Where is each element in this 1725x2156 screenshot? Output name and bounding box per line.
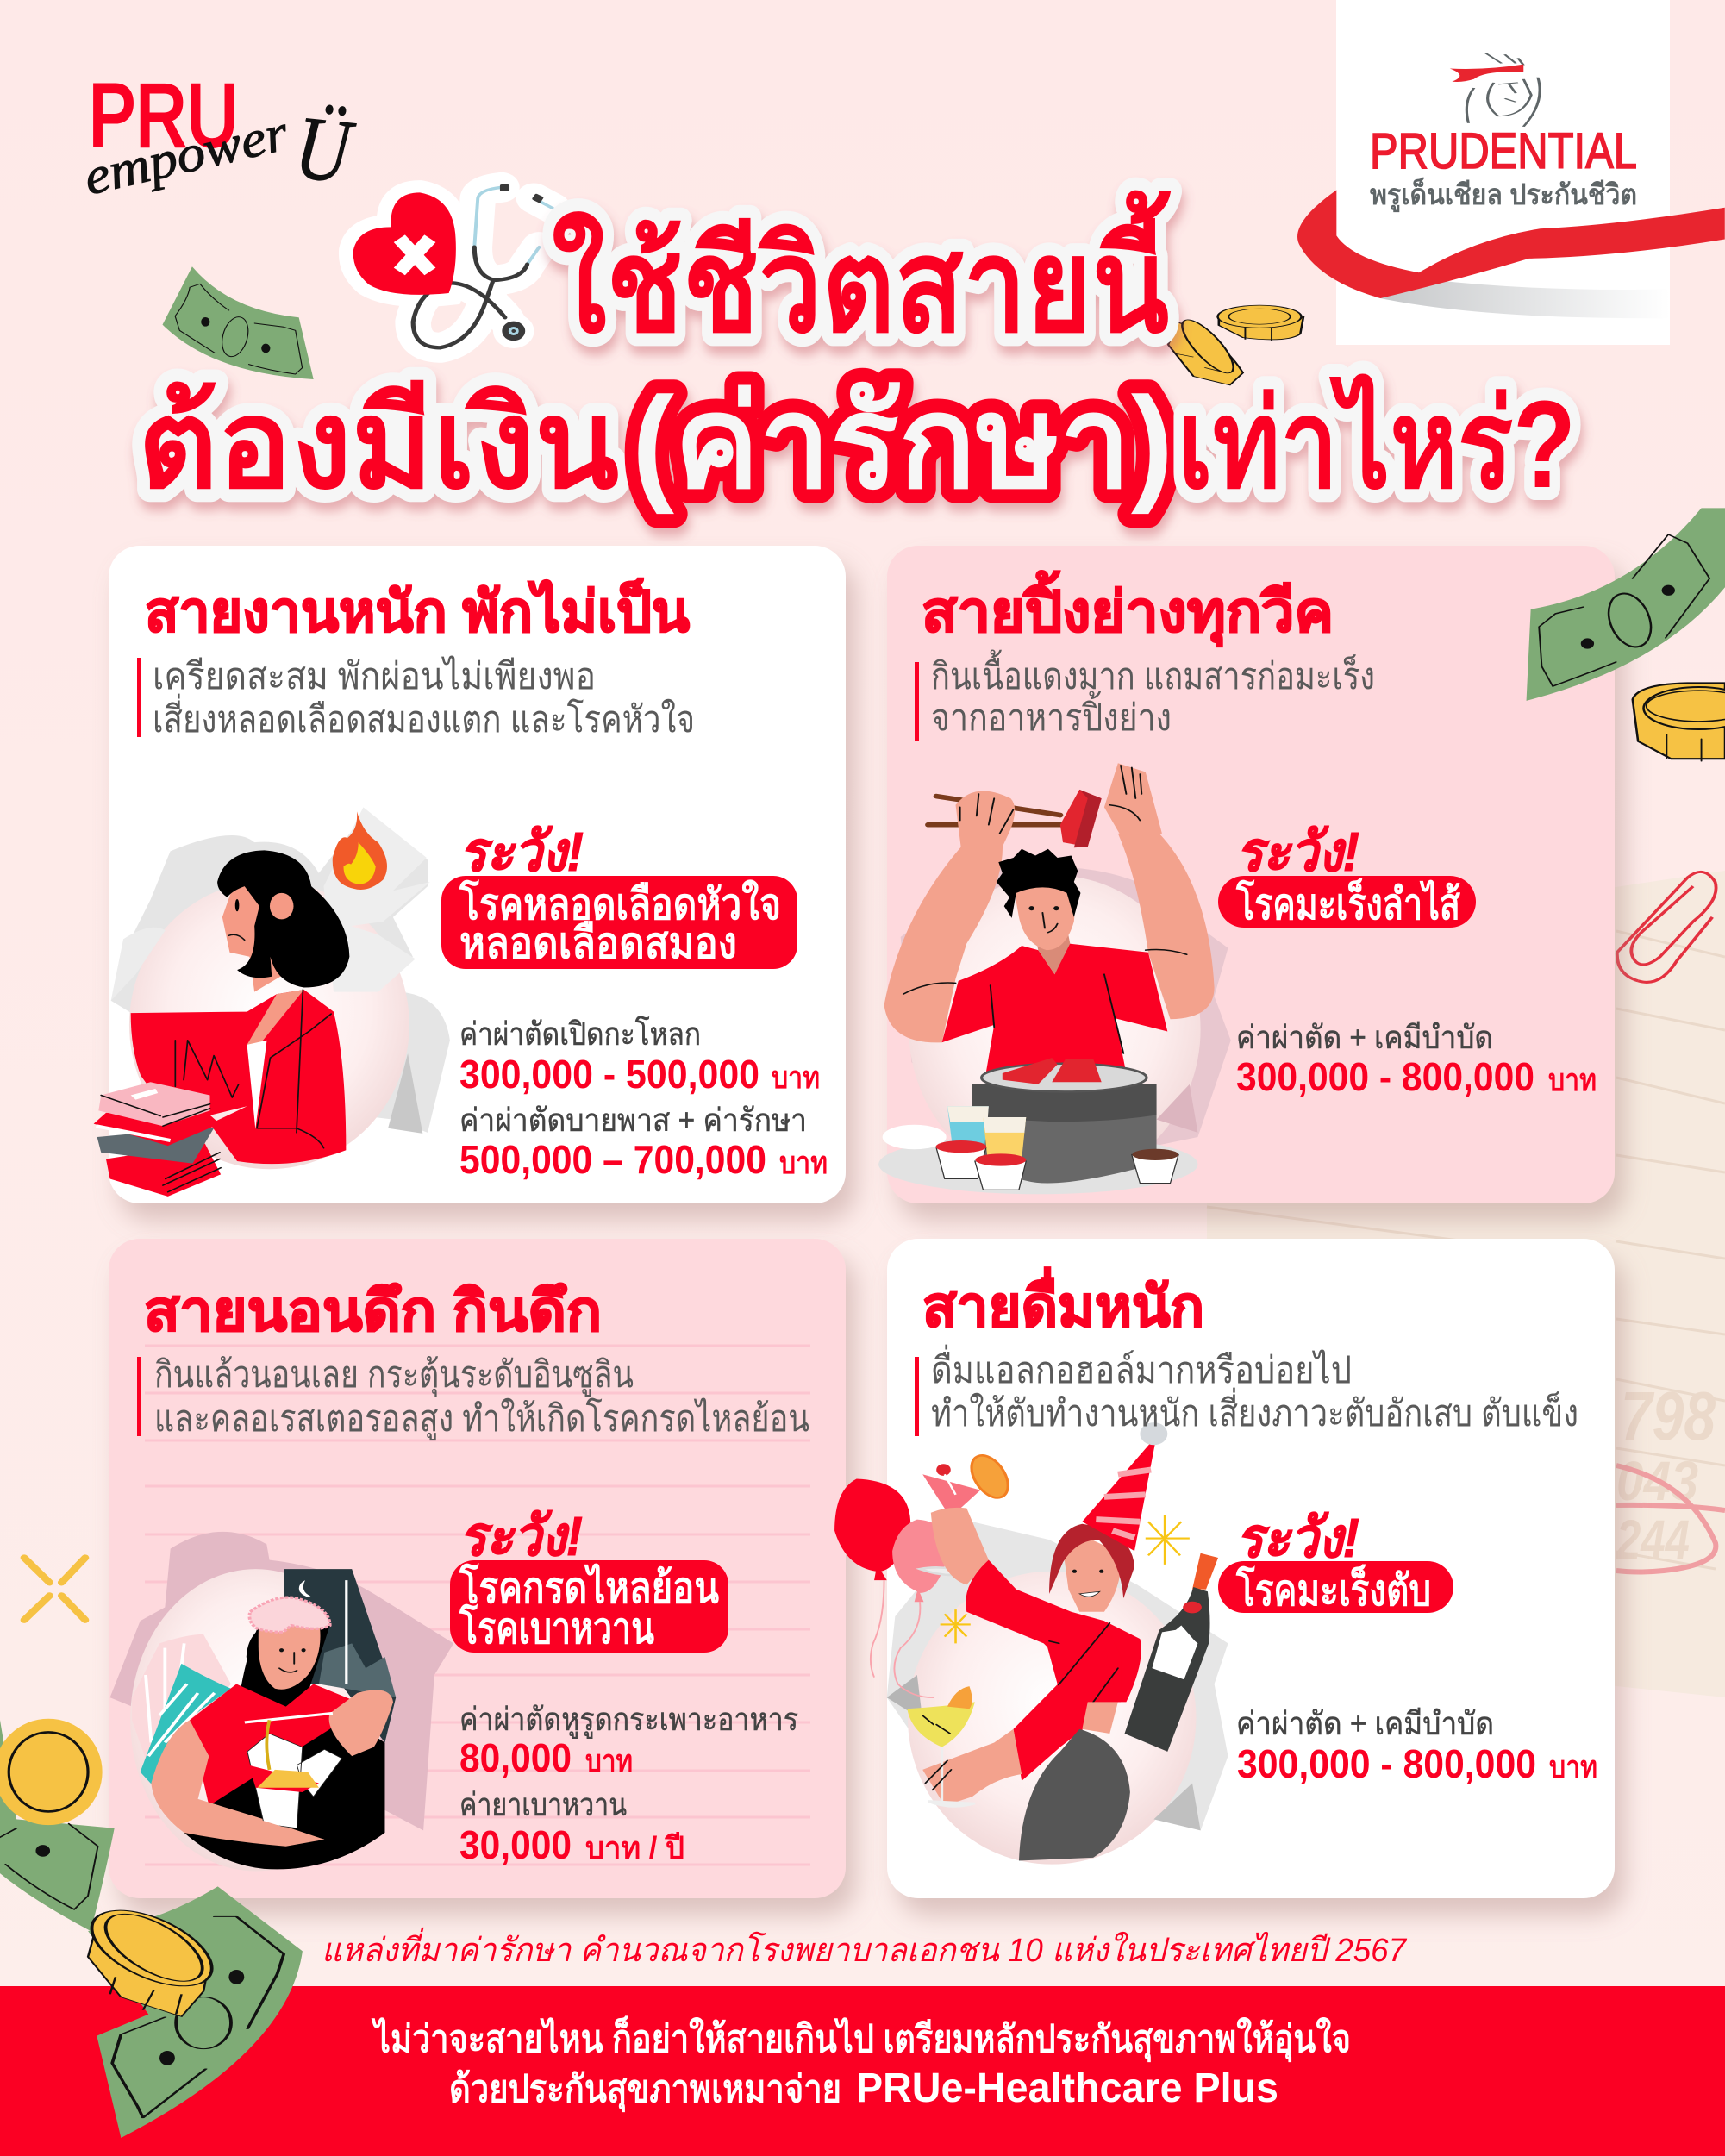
callout: warning: โรคมะเร็งตับ (1235, 1564, 1431, 1615)
footer band: ไม่ว่าจะสายไหน ก็อย่าให้สายเกินไป เตรียมหลักประกันสุขภาพให้อุ่นใจ (372, 2015, 1351, 2063)
text block: description: และคลอเรสเตอรอลสูง ทำให้เกิดโรคกรดไหลย้อน (154, 1397, 809, 1441)
icon: yellow sparkle cross (24, 1558, 85, 1620)
text block: costs: 300,000 - 800,000 (1236, 1054, 1534, 1099)
text block: costs: 300,000 - 800,000 (1237, 1741, 1536, 1786)
footer band (0, 1986, 1725, 2156)
icon: paperclip (1617, 872, 1716, 982)
heading: สายดื่มหนัก (922, 1267, 1204, 1338)
logo: Prudential: PRUDENTIAL (1370, 123, 1637, 179)
background: notebook paper: 043 (1616, 1450, 1698, 1512)
logo: Prudential (1297, 0, 1725, 345)
text block: costs: บาท (1549, 1749, 1597, 1784)
text block: description: กินเนื้อแดงมาก แถมสารก่อมะเร็ง (931, 649, 1375, 697)
text block: costs: บาท (585, 1743, 633, 1778)
text block: costs: ค่าผ่าตัดบายพาส + ค่ารักษา (459, 1103, 807, 1138)
callout: warning: ระวัง! (459, 1505, 583, 1567)
logo: PRU empower U: Ü (291, 97, 359, 203)
text block: costs (1236, 1706, 1597, 1786)
text block: costs (1236, 1020, 1597, 1099)
text block: description (915, 1345, 1578, 1436)
text block: costs (459, 1702, 798, 1867)
text block: costs: 500,000 – 700,000 (459, 1137, 766, 1182)
callout: warning: โรคเบาหวาน (459, 1603, 654, 1653)
illustration: woman eating noodles at night (110, 1532, 453, 1872)
callout: warning: โรคกรดไหลย้อน (459, 1562, 719, 1612)
callout: warning (450, 1505, 728, 1653)
panel: heavy drinking (834, 1239, 1615, 1898)
callout: warning: ระวัง! (1236, 821, 1359, 883)
text block: costs: ค่าผ่าตัดหูรูดกระเพาะอาหาร (459, 1702, 798, 1739)
text block: description (137, 1354, 809, 1441)
icon: money bill top left (163, 266, 314, 379)
text block: description (915, 649, 1375, 741)
icon: coins near title (1168, 305, 1303, 385)
footer band: PRUe-Healthcare Plus (856, 2065, 1278, 2111)
text block: description: จากอาหารปิ้งย่าง (931, 691, 1172, 739)
callout: warning: ระวัง! (459, 821, 584, 883)
callout: warning: ระวัง! (1236, 1507, 1359, 1569)
logo: Prudence head mark (1450, 53, 1540, 127)
text block: description: กินแล้วนอนเลย กระตุ้นระดับอินซูลิน (154, 1354, 634, 1397)
logo: Prudential: พรูเด็นเชียล ประกันชีวิต (1370, 177, 1637, 213)
text block: costs: บาท / ปี (585, 1830, 684, 1865)
text block: costs: ค่าผ่าตัดเปิดกะโหลก (459, 1016, 701, 1052)
text block: description: เสี่ยงหลอดเลือดสมองแตก และโรคหัวใจ (153, 694, 695, 741)
panel: overwork (94, 546, 846, 1203)
logo: PRU empower U: empower (78, 103, 293, 206)
icon: coin right (1633, 683, 1725, 761)
background: notebook paper (1207, 871, 1725, 1697)
text block: costs: ค่าผ่าตัด + เคมีบำบัด (1236, 1706, 1494, 1741)
text block: costs: ค่ายาเบาหวาน (459, 1787, 627, 1822)
heading: สายปิ้งย่างทุกวีค (922, 570, 1334, 647)
footer band: ด้วยประกันสุขภาพเหมาจ่าย (449, 2068, 841, 2113)
text block: costs: บาท (1548, 1062, 1597, 1097)
text block: costs: 300,000 - 500,000 (459, 1052, 759, 1097)
callout: warning (441, 821, 797, 969)
logo: PRU empower U (78, 66, 359, 206)
panel: late sleeping (109, 1239, 846, 1898)
title: (ค่ารักษา) (632, 370, 1173, 515)
icon: flame (333, 811, 387, 890)
text block: costs: ค่าผ่าตัด + เคมีบำบัด (1236, 1020, 1493, 1055)
icon: book stack (94, 1082, 221, 1197)
text block: costs: บาท (779, 1145, 828, 1180)
illustration: partying woman with drinks (834, 1422, 1228, 1865)
panel: grilled food (878, 546, 1615, 1203)
text block: description (137, 655, 695, 741)
callout: warning: โรคมะเร็งลำไส้ (1235, 878, 1460, 928)
title: ต้องมีเงิน (138, 375, 619, 514)
icon: money bill right (1527, 508, 1725, 701)
callout: warning: โรคหลอดเลือดหัวใจ (459, 878, 781, 928)
icon: heart and stethoscope (353, 184, 553, 348)
text block: description: เครียดสะสม พักผ่อนไม่เพียงพอ (153, 655, 596, 697)
text block: costs: บาท (772, 1059, 820, 1095)
text block: description: ดื่มแอลกอฮอล์มากหรือบ่อยไป (931, 1345, 1352, 1391)
callout: warning: หลอดเลือดสมอง (459, 919, 737, 967)
text block: costs: 30,000 (459, 1822, 572, 1867)
illustration: man eating grilled meat (878, 763, 1231, 1194)
text block: costs: 80,000 (459, 1735, 572, 1780)
icon: money and coin lower left (0, 1719, 115, 1931)
icon: money and coin bottom (68, 1886, 303, 2138)
title: เท่าไหร่? (1178, 373, 1576, 514)
title (138, 190, 1576, 515)
source note: แหล่งที่มาค่ารักษา คำนวณจากโรงพยาบาลเอกชน 10 แห่งในประเทศไทยปี 2567 (322, 1927, 1408, 1969)
text block: costs (459, 1016, 828, 1182)
heading: สายงานหนัก พักไม่เป็น (145, 578, 690, 643)
logo: PRU empower U: PRU (89, 66, 238, 165)
title: ใช้ชีวิตสายนี้ (552, 190, 1172, 359)
background: notebook paper: 244 (1616, 1509, 1690, 1571)
callout: warning (1218, 1507, 1453, 1615)
illustration: stressed woman (94, 807, 450, 1197)
heading: สายนอนดึก กินดึก (144, 1279, 602, 1342)
callout: warning (1218, 821, 1476, 928)
text block: description: ทำให้ตับทำงานหนัก เสี่ยงภาวะตับอักเสบ ตับแข็ง (931, 1388, 1578, 1434)
logo: red ribbon (1297, 190, 1725, 318)
